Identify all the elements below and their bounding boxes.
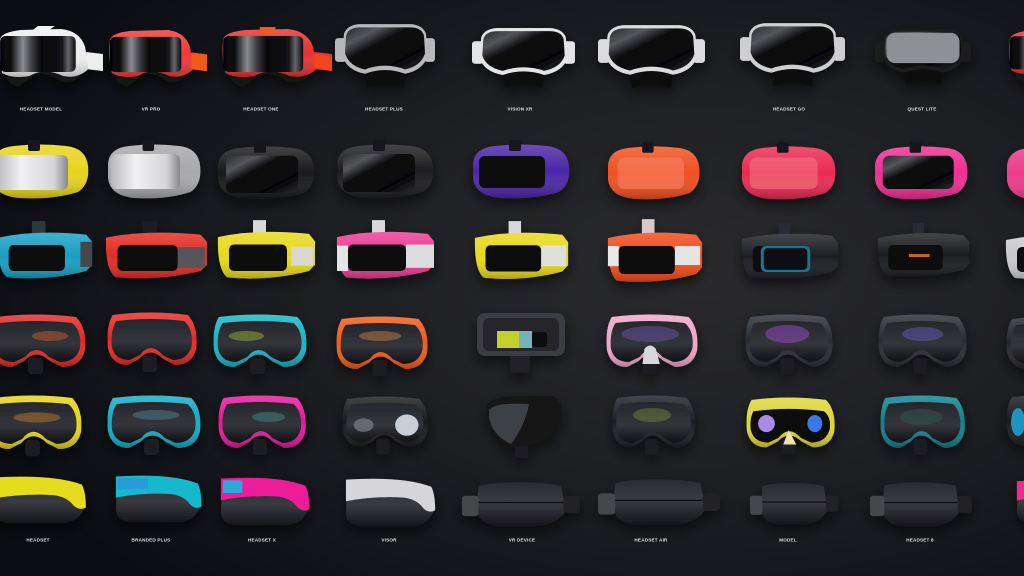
headset: white, cropped at edge [1006,235,1024,279]
label: HEADSET AIR [634,538,668,542]
row 1: white and red headsets [0,23,1024,89]
headset: pink, cropped at edge [1007,142,1024,200]
label: HEADSET GO [773,106,805,112]
headset: white [0,26,103,87]
row 4: goggle headsets with glowing lenses [0,312,1024,376]
headset: black with side clip [462,482,580,526]
row 2: silver, black and bright colour headsets [0,140,1024,200]
headset: yellow with white visor [0,140,88,198]
headset: black angular [870,482,972,526]
headset: purple [473,140,569,198]
headset: yellow goggle [0,396,81,456]
headset: dark goggle with violet glow [879,314,967,374]
headset: black with silver trim [335,24,435,88]
headset: magenta band [221,478,309,525]
headset: red with orange strap [222,27,332,87]
label: HEADSET ONE [243,106,279,112]
headset: yellow with violet and blue lenses [747,397,835,454]
row 1 labels [20,106,937,112]
headset: black [218,142,314,199]
headset: yellow [218,220,315,279]
label: VR PRO [142,106,161,112]
headset: cyan goggle [214,314,306,374]
headset: teal goggle [880,396,965,455]
label: HEADSET 8 [906,538,934,542]
label: MODEL [779,538,797,542]
headset: magenta goggle [219,396,306,455]
headset: black with blue trim [742,223,838,279]
headset: red [109,30,207,87]
headset: black smooth [487,396,561,458]
headset: yellow and white [475,221,568,279]
headset: red and grey [106,221,207,278]
headset: cyan goggle [108,396,200,455]
label: BRANDED PLUS [132,538,170,542]
headset: black wide [598,479,720,525]
headset: coral red [742,142,835,199]
headset: red, cropped at edge [1009,30,1024,83]
row 5: goggle headsets [0,394,1024,458]
row 6 labels [26,538,934,542]
row 6: top-band and black headsets [0,476,1024,526]
headset: dark, cropped at edge [1007,316,1024,376]
headset: silver [108,140,200,198]
headset: cyan band [116,476,201,522]
label: QUEST LITE [907,106,937,112]
headset: red goggle [0,314,85,374]
headset: yellow band [0,477,86,523]
row 3: banded headsets [0,219,1024,282]
headset: dark with cyan edge [612,396,695,455]
headset: white and black [740,23,845,87]
label: HEADSET [26,538,50,542]
label: HEADSET X [248,538,277,542]
headset: pink and white goggle [607,314,697,374]
headset: pink [875,142,967,199]
headset: orange and white [608,219,702,282]
headset: cyan [0,221,92,278]
headset: black with orange light [878,223,969,277]
headset: dark with cyan edge, cropped [1007,394,1024,454]
headset: dark with cyan trim and magenta glow [746,314,833,374]
label: VISOR [381,538,397,542]
headset: black compact [750,483,838,524]
label: VISION XR [507,106,533,112]
label: HEADSET PLUS [365,106,403,112]
label: HEADSET MODEL [20,106,62,112]
headset: white compact [472,28,575,88]
headset: white band [346,479,435,526]
headset: grey panel with colour display [477,313,565,373]
headset: magenta band, cropped at edge [1017,480,1024,523]
headset: grey [875,29,971,85]
headset: white large [598,25,705,89]
headset: orange goggle [337,316,427,376]
headset: black glossy [337,140,433,198]
headset: black with white reflections [342,396,428,454]
headset: orange [608,142,699,199]
label: VR DEVICE [509,538,535,542]
headset: pink and white [337,220,434,279]
headset: red goggle [108,312,197,372]
